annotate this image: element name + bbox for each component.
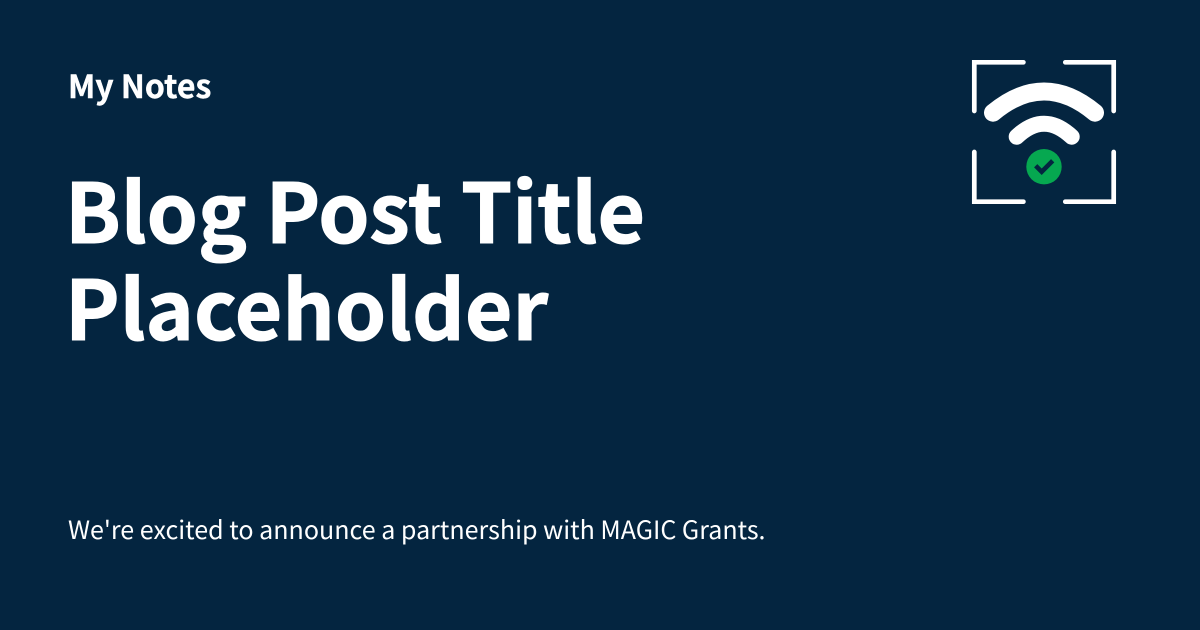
icon: wifi arcs [993,92,1095,137]
title [65,148,645,364]
icon: green check badge [1026,149,1062,184]
icon: scan frame corners [974,62,1114,202]
title: Placeholder [65,245,548,364]
site name: My Notes [68,62,211,108]
description: We're excited to announce a partnership with MAGIC Grants. [68,511,766,547]
title: Blog Post Title [65,148,645,267]
icon: wifi with check in scan frame [972,60,1116,204]
